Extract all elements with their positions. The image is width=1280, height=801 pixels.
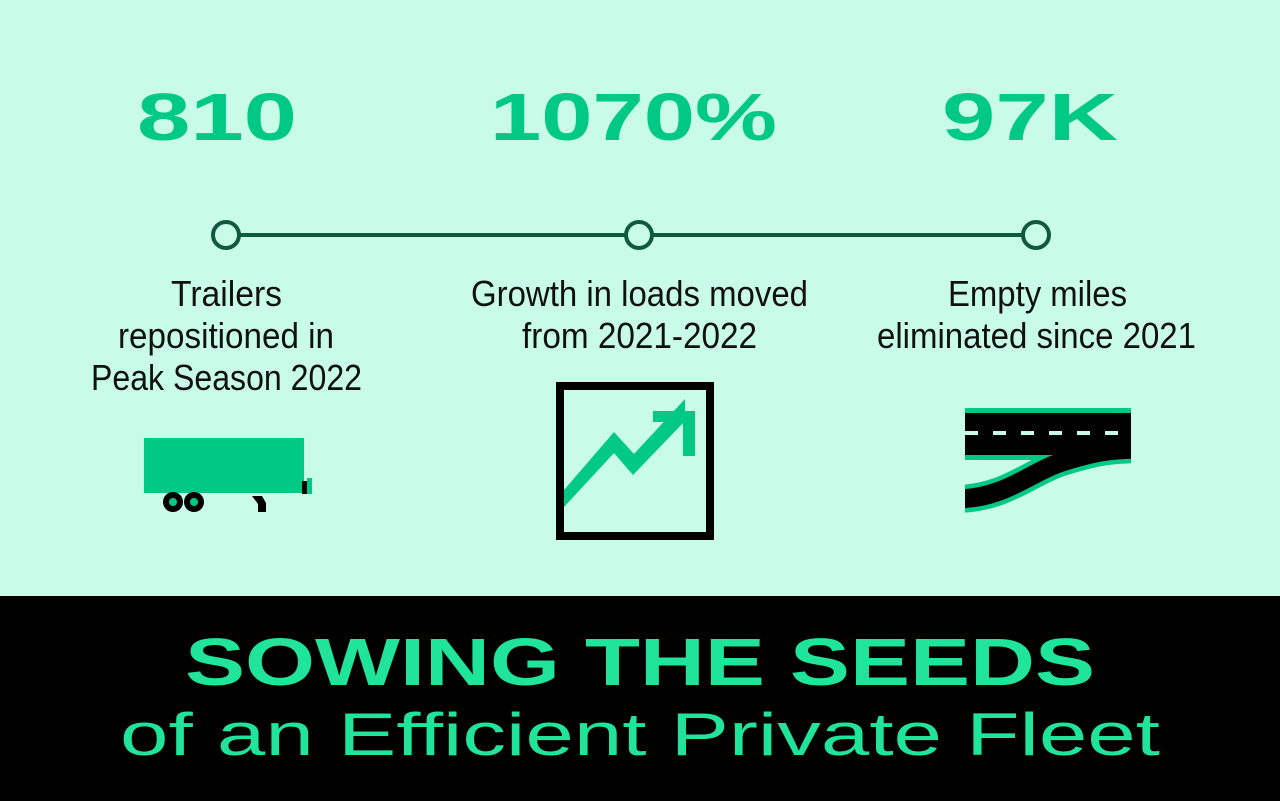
stat: 1070%: 1070% — [490, 80, 777, 155]
label: trailers: Peak Season 2022 — [91, 357, 362, 398]
label: empty miles — [877, 273, 1196, 356]
label: empty miles: Empty miles — [948, 273, 1127, 314]
label: trailers: Trailers — [171, 273, 282, 314]
icon: trailer — [144, 438, 312, 512]
label: trailers — [91, 273, 362, 398]
label: growth: Growth in loads moved — [471, 273, 808, 314]
label: trailers: repositioned in — [118, 315, 334, 356]
label: growth: from 2021-2022 — [522, 315, 757, 356]
icon: road — [955, 408, 1145, 499]
label: empty miles: eliminated since 2021 — [877, 315, 1196, 356]
title — [120, 625, 1160, 768]
icon: growth chart — [560, 386, 710, 536]
title: of an Efficient Private Fleet — [120, 701, 1160, 768]
timeline — [213, 222, 1049, 248]
footer band — [0, 596, 1280, 801]
stat: 810: 810 — [137, 80, 297, 155]
label: growth — [471, 273, 808, 356]
stat: 97K: 97K — [942, 80, 1118, 155]
title: SOWING THE SEEDS — [185, 625, 1095, 700]
